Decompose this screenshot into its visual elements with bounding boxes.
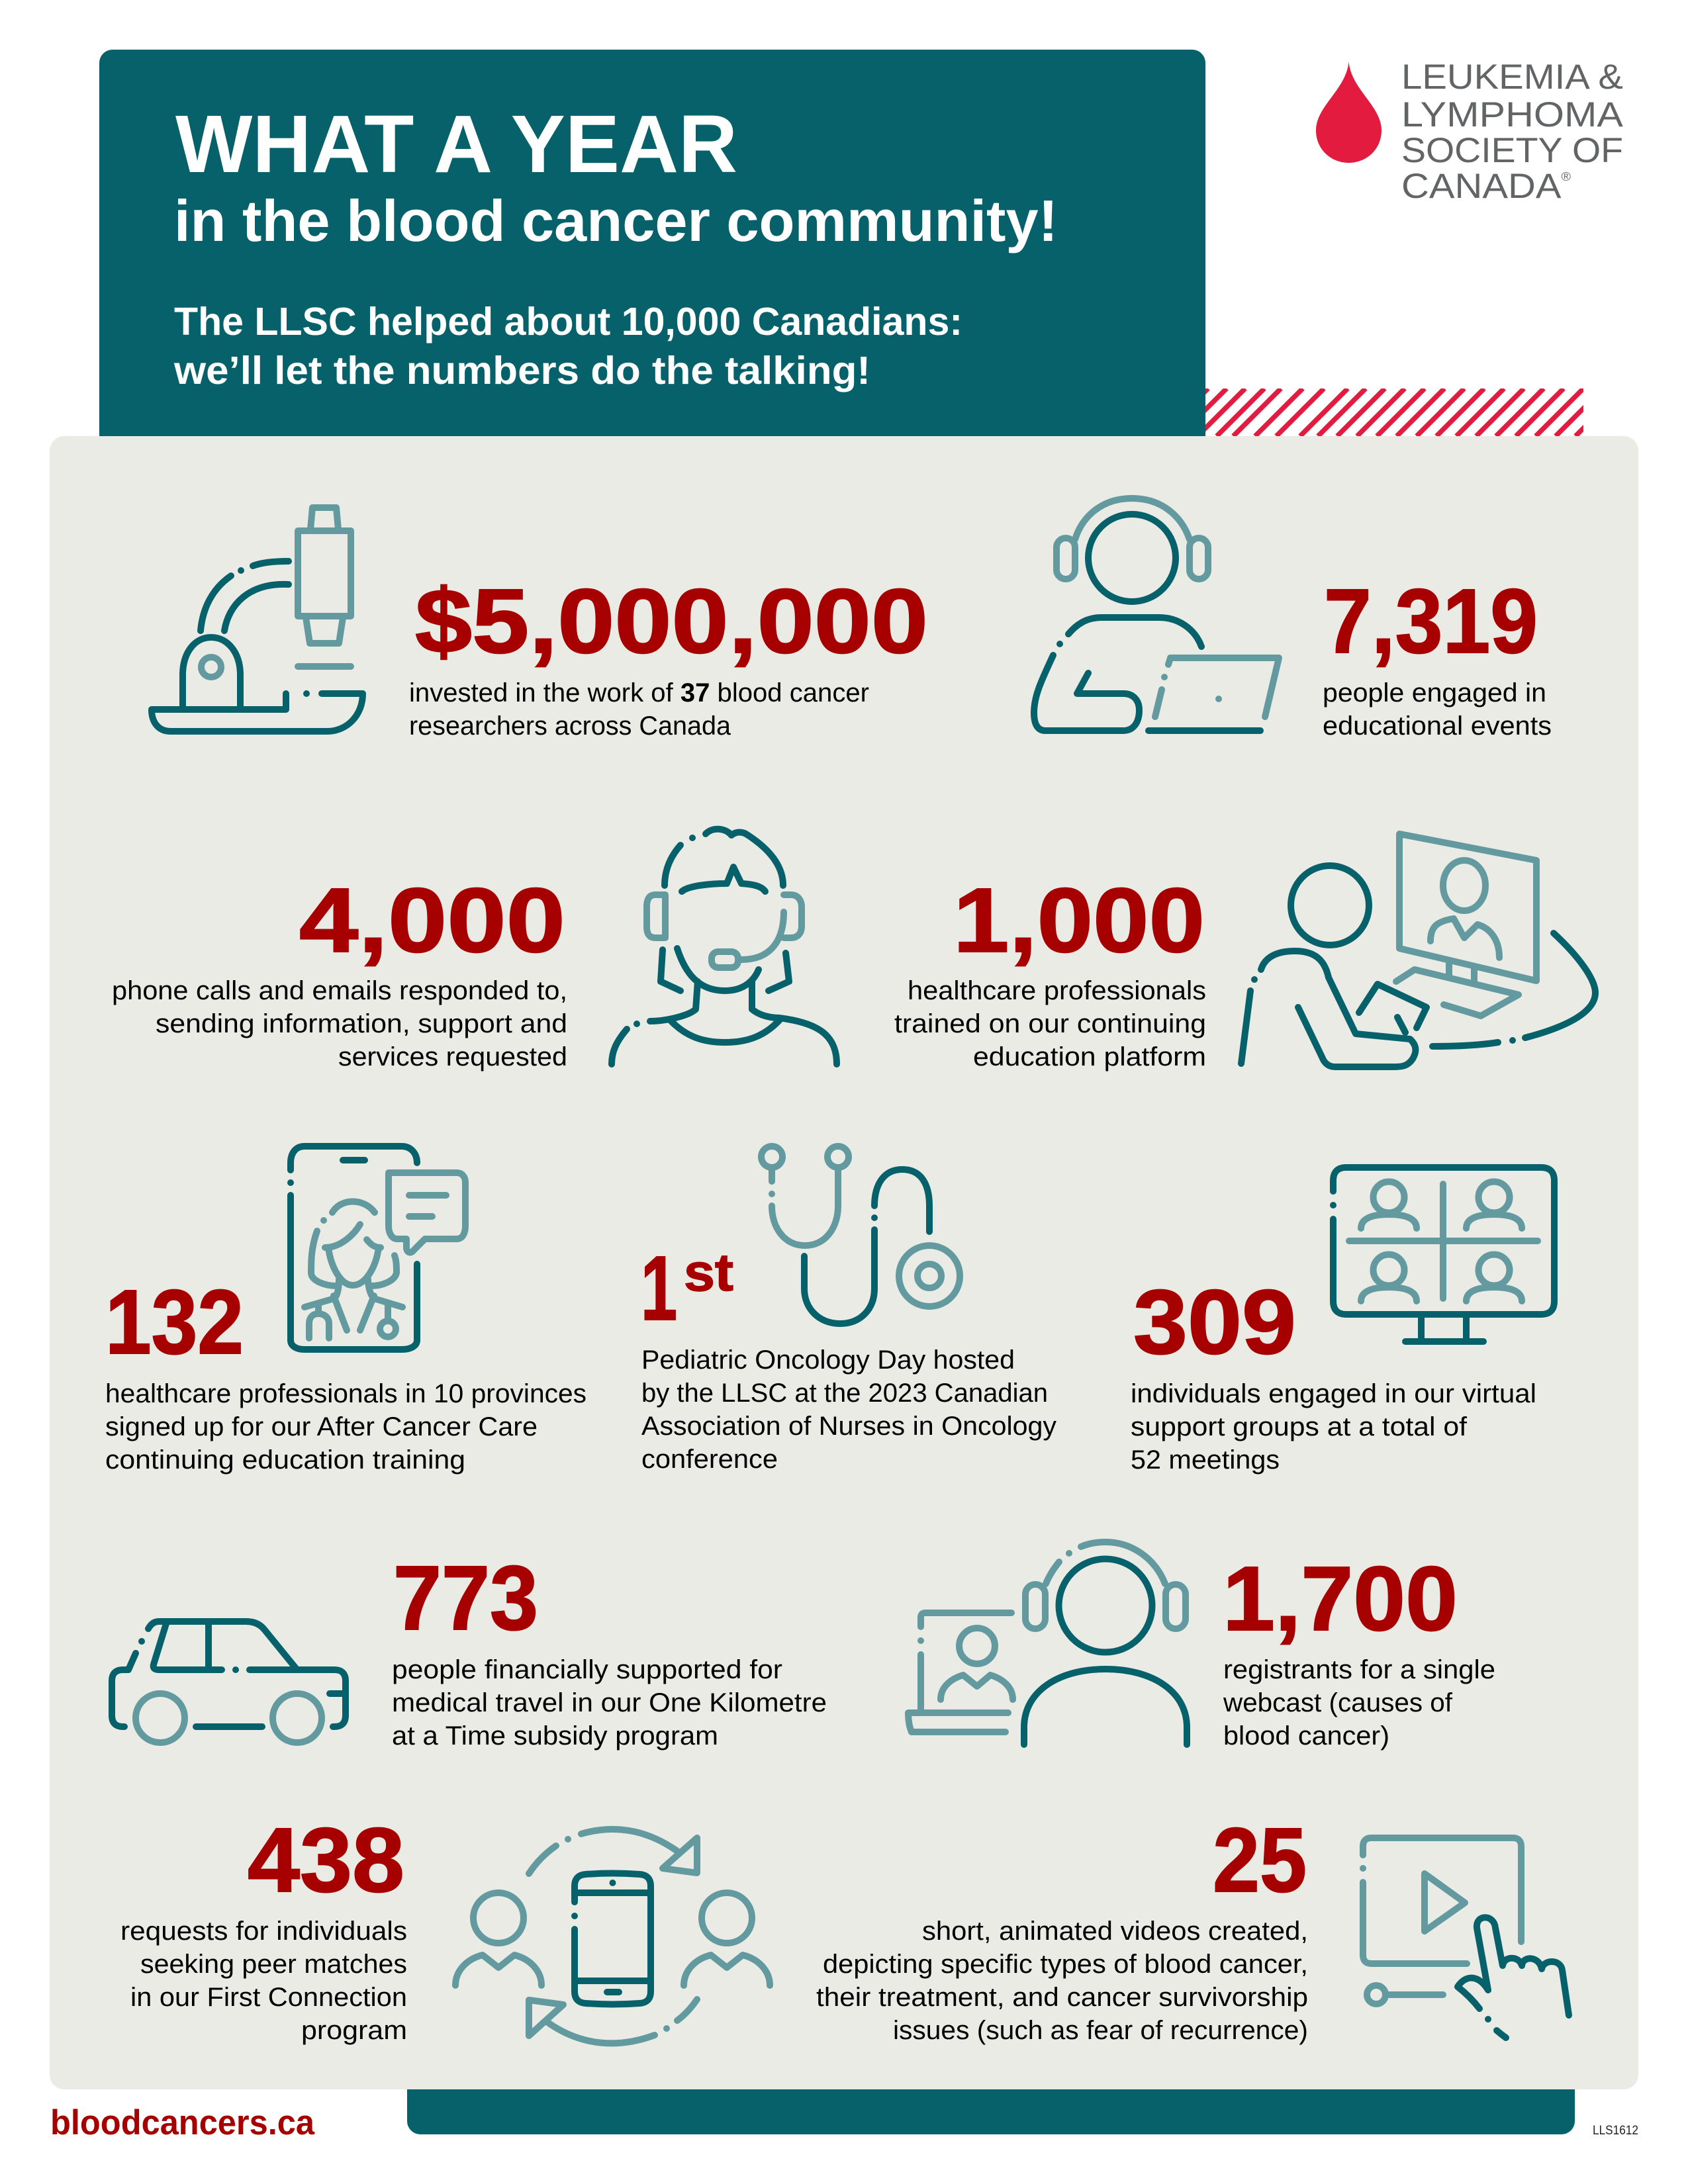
footer bar xyxy=(407,2085,1575,2134)
number: 1,000 xyxy=(953,870,1205,972)
stat: peer matches xyxy=(120,1809,770,2045)
number: 438 xyxy=(248,1809,404,1911)
stat: Pediatric Oncology Day xyxy=(641,1146,1056,1474)
description xyxy=(641,1345,1056,1474)
description xyxy=(894,976,1206,1071)
stat: webcast registrants xyxy=(908,1542,1495,1751)
icon: person with headphones and laptop xyxy=(1034,498,1279,731)
description: blood cancer) xyxy=(1223,1721,1389,1751)
description xyxy=(1131,1379,1536,1475)
description: support groups at a total of xyxy=(1131,1412,1468,1441)
icon: person at computer xyxy=(1241,834,1595,1067)
header panel xyxy=(99,50,1205,436)
icon: peer exchange around phone xyxy=(455,1829,770,2043)
description: healthcare professionals in 10 provinces xyxy=(105,1379,586,1408)
description: Association of Nurses in Oncology xyxy=(641,1412,1056,1441)
number: st xyxy=(684,1243,733,1302)
number: 309 xyxy=(1133,1271,1296,1373)
description: in our First Connection xyxy=(130,1983,407,2012)
stat: virtual support groups xyxy=(1131,1167,1554,1475)
description xyxy=(112,976,567,1071)
description: issues (such as fear of recurrence) xyxy=(893,2016,1308,2045)
icon: support agent with headset xyxy=(612,829,837,1064)
title: WHAT A YEAR xyxy=(175,99,737,190)
description: by the LLSC at the 2023 Canadian xyxy=(641,1379,1048,1408)
logo wordmark: SOCIETY OF xyxy=(1401,131,1623,170)
stat: After Cancer Care sign-ups xyxy=(105,1146,586,1475)
icon: car xyxy=(112,1621,346,1743)
description: educational events xyxy=(1323,711,1552,741)
description: continuing education training xyxy=(105,1445,465,1475)
description: their treatment, and cancer survivorship xyxy=(816,1983,1308,2012)
number: 4,000 xyxy=(299,870,565,972)
description xyxy=(392,1655,827,1751)
document code: LLS1612 xyxy=(1593,2124,1638,2138)
description: conference xyxy=(641,1445,778,1474)
description: at a Time subsidy program xyxy=(392,1721,718,1751)
logo wordmark: CANADA xyxy=(1401,167,1548,206)
stat: healthcare professionals trained xyxy=(894,834,1595,1071)
icon: microscope xyxy=(152,508,363,731)
description: people engaged in xyxy=(1323,678,1546,707)
description: depicting specific types of blood cancer, xyxy=(823,1950,1308,1979)
subtitle: in the blood cancer community! xyxy=(174,188,1058,253)
logo wordmark: LEUKEMIA & xyxy=(1401,58,1623,97)
icon: video call monitor xyxy=(1333,1167,1554,1342)
icon: video with pointing hand xyxy=(1363,1838,1569,2038)
description: people financially supported for xyxy=(392,1655,782,1684)
description: requests for individuals xyxy=(120,1917,407,1946)
number xyxy=(641,1238,733,1340)
number: 132 xyxy=(105,1271,244,1373)
description: education platform xyxy=(973,1042,1206,1071)
logo wordmark xyxy=(1401,58,1624,206)
description: seeking peer matches xyxy=(140,1950,407,1979)
icon: stethoscope xyxy=(761,1146,960,1324)
description: 52 meetings xyxy=(1131,1445,1280,1475)
website url: bloodcancers.ca xyxy=(50,2103,314,2142)
stat: research funding xyxy=(152,508,928,741)
description: healthcare professionals xyxy=(908,976,1206,1005)
stat: phone calls and emails xyxy=(112,829,837,1071)
icon: doctor on smartphone xyxy=(291,1146,465,1349)
icon: webcast viewer xyxy=(908,1542,1187,1745)
main panel xyxy=(50,436,1638,2089)
number: $5,000,000 xyxy=(415,570,928,672)
description: medical travel in our One Kilometre xyxy=(392,1688,827,1717)
description xyxy=(105,1379,586,1475)
number: 1,700 xyxy=(1223,1548,1458,1650)
icon: blood drop xyxy=(1316,62,1382,163)
logo wordmark: ® xyxy=(1561,170,1571,183)
description: program xyxy=(301,2016,407,2045)
number: 1 xyxy=(641,1238,677,1340)
description: invested in the work of 37 blood cancer xyxy=(409,678,869,707)
logo xyxy=(1316,58,1624,206)
description: phone calls and emails responded to, xyxy=(112,976,567,1005)
number: 7,319 xyxy=(1324,570,1538,672)
description: Pediatric Oncology Day hosted xyxy=(641,1345,1015,1375)
description: registrants for a single xyxy=(1223,1655,1495,1684)
description: short, animated videos created, xyxy=(922,1917,1308,1946)
number: 25 xyxy=(1213,1809,1307,1911)
logo wordmark: LYMPHOMA xyxy=(1401,95,1624,134)
striped accent xyxy=(1205,388,1583,436)
description: individuals engaged in our virtual xyxy=(1131,1379,1536,1408)
description xyxy=(1323,678,1552,741)
description xyxy=(409,678,869,741)
stat: educational events xyxy=(1034,498,1552,741)
description xyxy=(120,1917,407,2045)
description: sending information, support and xyxy=(156,1009,567,1038)
intro text: we’ll let the numbers do the talking! xyxy=(173,349,870,392)
number: 773 xyxy=(393,1547,538,1649)
intro text xyxy=(173,300,962,392)
description: researchers across Canada xyxy=(409,711,731,741)
stat: animated videos xyxy=(816,1809,1569,2045)
description: signed up for our After Cancer Care xyxy=(105,1412,538,1441)
description: trained on our continuing xyxy=(894,1009,1206,1038)
intro text: The LLSC helped about 10,000 Canadians: xyxy=(174,300,962,343)
description: webcast (causes of xyxy=(1223,1688,1453,1717)
description: services requested xyxy=(338,1042,567,1071)
stat: medical travel subsidy xyxy=(112,1547,827,1751)
description xyxy=(816,1917,1308,2045)
description xyxy=(1223,1655,1495,1751)
